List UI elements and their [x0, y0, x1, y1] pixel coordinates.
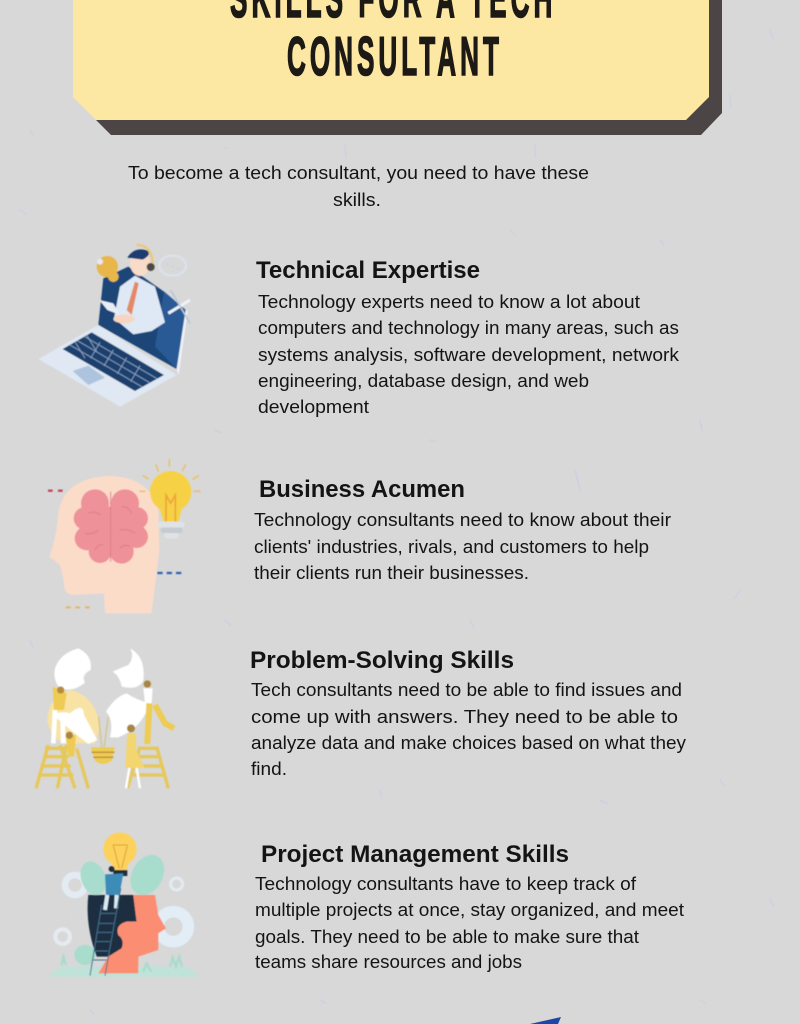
- body text: find.: [251, 758, 287, 779]
- body text: [255, 873, 684, 972]
- body text: computers and technology in many areas, such as: [258, 317, 679, 338]
- body text: analyze data and make choices based on what they: [251, 732, 687, 753]
- icon: head with brain and light bulb: [48, 460, 200, 613]
- heading: Project Management Skills: [261, 841, 569, 868]
- body text: Technology consultants have to keep track of: [255, 873, 637, 894]
- panel: problem-solving skills: [36, 647, 687, 788]
- intro text: skills.: [333, 189, 381, 210]
- body text: clients' industries, rivals, and customers to help: [254, 536, 649, 557]
- panel: project management skills: [48, 832, 684, 977]
- body text: Technology consultants need to know about their: [254, 509, 671, 530]
- panel: technical expertise: [38, 245, 680, 417]
- banner shadow: [96, 0, 722, 135]
- body text: [258, 291, 680, 417]
- body text: Tech consultants need to be able to find issues and: [251, 679, 682, 700]
- body text: come up with answers. They need to be able to: [251, 706, 678, 727]
- body text: [254, 509, 671, 583]
- intro text: To become a tech consultant, you need to have these: [128, 162, 589, 183]
- banner panel: [73, 0, 709, 120]
- body text: [251, 679, 687, 779]
- icon: light bulb puzzle with people on ladders: [36, 648, 174, 788]
- heading: Business Acumen: [259, 476, 465, 503]
- body text: engineering, database design, and web: [258, 370, 589, 391]
- title line 2: CONSULTANT: [287, 26, 503, 88]
- icon: laptop with consultant: [38, 245, 190, 407]
- heading: Technical Expertise: [256, 257, 480, 284]
- body text: development: [258, 396, 369, 417]
- body text: goals. They need to be able to make sure that: [255, 926, 639, 947]
- icon: cropped blue shape at bottom: [530, 1017, 561, 1024]
- heading: Problem-Solving Skills: [250, 647, 514, 674]
- body text: multiple projects at once, stay organized, and meet: [255, 899, 684, 920]
- body text: teams share resources and jobs: [255, 951, 522, 972]
- body text: systems analysis, software development, network: [258, 344, 680, 365]
- body text: their clients run their businesses.: [254, 562, 529, 583]
- body text: Technology experts need to know a lot about: [258, 291, 640, 312]
- panel: business acumen: [48, 460, 671, 613]
- intro text: [128, 162, 589, 210]
- icon: head with ladder and light bulb: [48, 832, 200, 977]
- title banner: [73, 0, 722, 135]
